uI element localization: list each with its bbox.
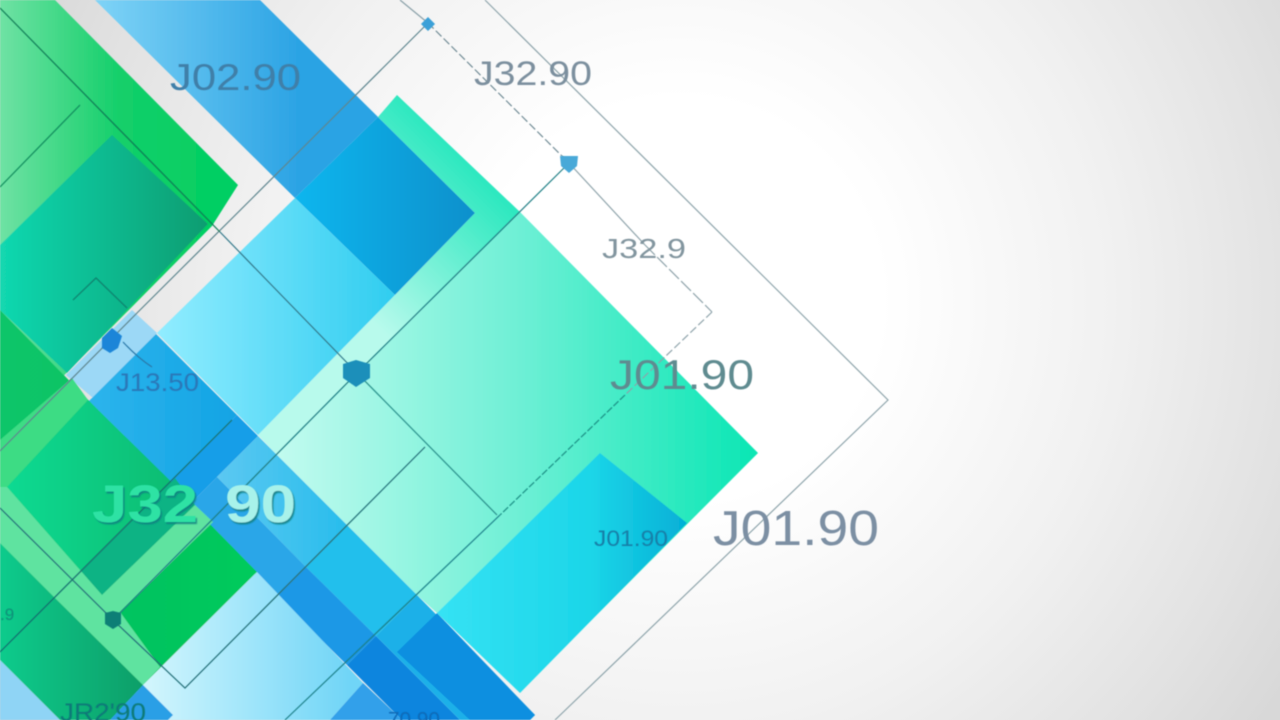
panel: upper pale green strip — [0, 378, 88, 490]
panel: big mint diamond — [276, 212, 758, 692]
text: .9 clipped: .9 — [0, 605, 14, 624]
icon: node lower — [105, 611, 121, 629]
icon: node top — [421, 17, 435, 31]
panel: lower cyan block — [437, 453, 687, 693]
chart lines: wireframe diamonds — [0, 0, 888, 720]
panel: lower green diamond — [0, 310, 257, 720]
icon: node upper — [560, 156, 578, 173]
panel: blue band lower cell — [376, 595, 535, 720]
panel: blue band upper cell — [86, 334, 237, 485]
panel: mid band cell — [188, 477, 306, 596]
text: J32.90 upper: J32.90 — [474, 55, 592, 93]
panel: blue overlap diamond — [295, 117, 475, 295]
text: J32 bright: J32 — [92, 475, 198, 534]
icon: node centre — [343, 360, 370, 387]
panel: top green diamond — [0, 0, 238, 440]
panel: pale green frame — [0, 487, 213, 685]
icon: node left — [102, 328, 122, 353]
panel: inner green diamond — [7, 400, 195, 595]
panel: blue band cell — [277, 567, 376, 665]
icon: node markers — [102, 17, 578, 629]
text: J01.90 small: J01.90 — [594, 526, 668, 551]
panel: dark blue lower block — [397, 613, 535, 720]
text: J01.90 middle: J01.90 — [610, 351, 754, 398]
panel: lower dark green block — [0, 543, 143, 720]
panel: mint top strip — [258, 95, 520, 454]
text: 90 bright: 90 — [225, 475, 296, 534]
text: J13.50: J13.50 — [116, 369, 199, 397]
panel: top blue band — [95, 0, 378, 198]
panel: blue chip bottom — [330, 683, 402, 720]
text: J01.90 large: J01.90 — [713, 502, 879, 556]
panel: dark teal facet — [80, 478, 195, 595]
panel: teal inner diamond — [0, 135, 208, 373]
panel: dark blue cross stripe — [167, 415, 258, 506]
panel: light cyan diamond — [157, 198, 395, 435]
text: J32.9: J32.9 — [602, 233, 686, 264]
panel: lower light-blue block — [143, 572, 363, 720]
panel: light band cell — [217, 436, 347, 567]
panel: diagonal colour blocks — [0, 0, 758, 720]
panel: pale blue strip — [66, 310, 157, 398]
heading labels — [0, 55, 879, 720]
panel: corner blue chip — [110, 685, 173, 720]
panel: dark blue strip — [347, 636, 460, 720]
panel: corner pale-blue block — [0, 660, 60, 720]
text: J02.90: J02.90 — [170, 57, 301, 98]
panel: cyan band cell — [306, 525, 417, 636]
